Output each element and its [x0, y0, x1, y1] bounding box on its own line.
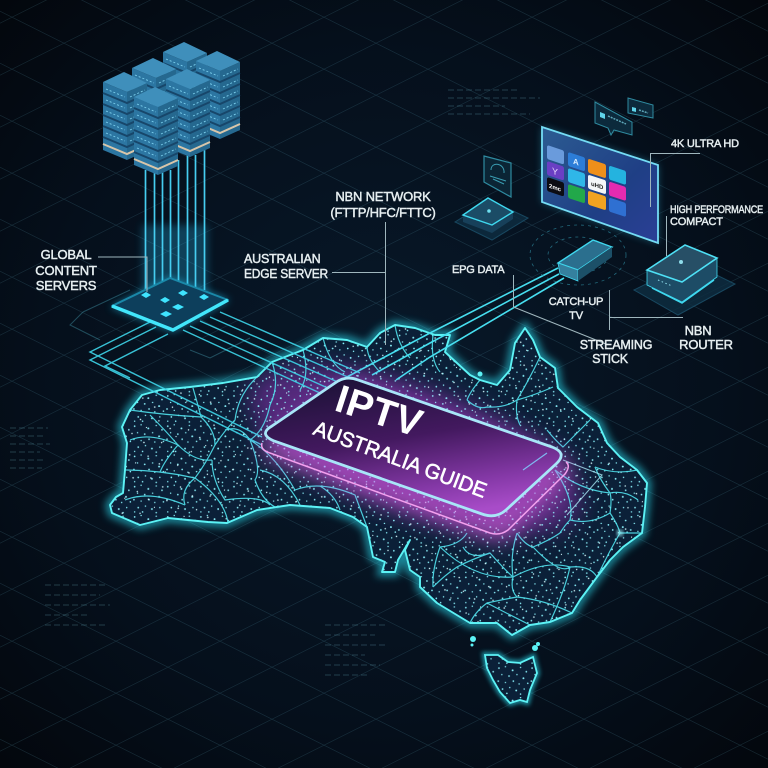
map of Australia — [100, 316, 657, 644]
circuit lines from edge server across map — [90, 312, 360, 445]
edge server platform — [110, 277, 230, 332]
label: catch-up TV: CATCH-UP — [549, 296, 603, 308]
label: NBN network: NBN NETWORK — [335, 189, 431, 204]
speech bubbles — [595, 98, 653, 135]
label: streaming stick: STREAMING — [580, 338, 652, 352]
islands — [470, 372, 540, 651]
subtitle text: AUSTRALIA GUIDE — [310, 417, 490, 503]
device: streaming stick — [558, 240, 612, 281]
map of Tasmania — [485, 655, 537, 703]
label: high performance compact: COMPACT — [670, 216, 723, 228]
label: 4K ultra HD: 4K ULTRA HD — [671, 138, 739, 150]
label: NBN router: NBN — [685, 323, 711, 338]
faint circuit frame — [70, 290, 250, 358]
signal rings around stick — [530, 225, 626, 285]
beams from global servers to edge server — [146, 150, 204, 308]
device: set-top box with card — [455, 156, 528, 240]
label: global content servers: CONTENT — [35, 263, 97, 278]
corner highlight — [523, 453, 547, 470]
label: australian edge server: AUSTRALIAN — [244, 252, 321, 266]
connection lines from streaming stick to map — [345, 268, 564, 380]
label: streaming stick — [580, 338, 652, 366]
label: EPG data — [452, 264, 606, 344]
device: NBN router — [634, 245, 735, 315]
label: global content servers: GLOBAL — [41, 247, 91, 262]
app tiles — [547, 145, 626, 217]
label: catch-up TV — [549, 290, 683, 330]
plate glow — [265, 445, 565, 530]
label: australian edge server — [244, 252, 328, 281]
bright hub node — [617, 530, 623, 536]
label: catch-up TV: TV — [569, 310, 584, 322]
label: NBN network — [330, 189, 436, 345]
inset frame right of plate — [563, 460, 602, 515]
label: 4K ultra HD — [650, 138, 739, 207]
plate body — [265, 378, 561, 516]
label: global content servers: SERVERS — [36, 278, 97, 293]
label: NBN router: ROUTER — [679, 337, 733, 352]
outer pink outline — [262, 443, 568, 534]
app tiles: uHD — [591, 181, 604, 192]
label: global content servers — [35, 247, 147, 293]
app tiles: 2mc — [549, 183, 562, 194]
title text: IPTV — [330, 378, 428, 446]
app tiles: Y — [552, 166, 558, 178]
TV panel — [542, 127, 658, 243]
app tiles: A — [573, 157, 579, 167]
label: high performance compact — [666, 204, 763, 256]
faint data panels — [10, 90, 540, 675]
label: EPG data: EPG DATA — [452, 264, 505, 276]
label: australian edge server: EDGE SERVER — [244, 267, 328, 281]
label: streaming stick: STICK — [592, 352, 629, 366]
global content server stacks — [103, 42, 240, 175]
beam glow — [142, 225, 208, 305]
title plate — [262, 378, 568, 534]
label: NBN router — [679, 323, 733, 352]
label: NBN network: (FTTP/HFC/FTTC) — [330, 205, 436, 220]
